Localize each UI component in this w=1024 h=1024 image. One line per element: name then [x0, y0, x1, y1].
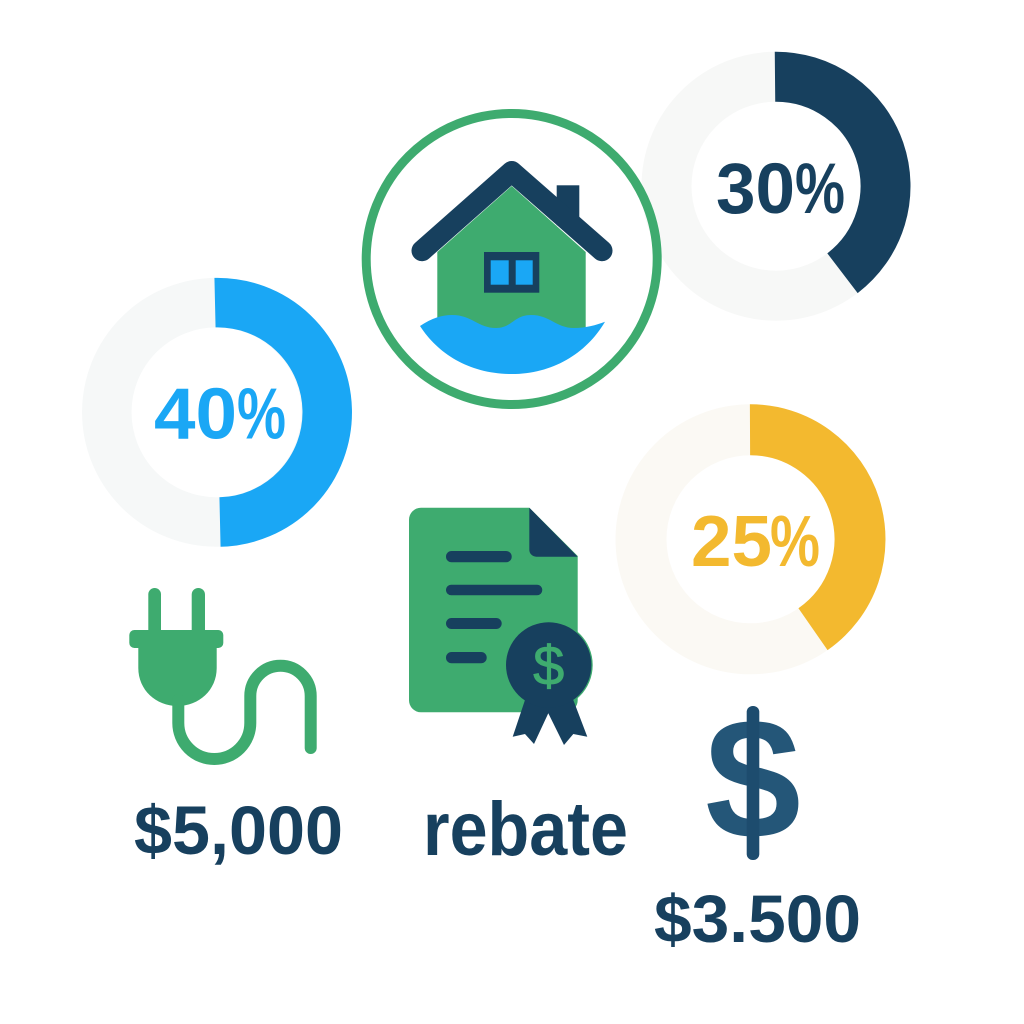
icon: large dollar sign: $	[705, 683, 801, 875]
icon: rebate document with badge: $	[533, 634, 564, 697]
donut chart: 40%: %	[237, 374, 286, 454]
donut chart: 40%	[107, 303, 327, 522]
donut chart: 30%: 30	[716, 150, 795, 229]
label: rebate: rebate	[423, 787, 628, 872]
label: $3.500: $3.500	[654, 882, 861, 957]
donut chart: 25%	[641, 430, 860, 649]
donut chart: 25%: %	[770, 502, 820, 582]
donut chart: 40%: 40	[154, 374, 237, 454]
donut chart: 30%	[666, 77, 886, 296]
icon: rebate document with badge	[409, 508, 593, 745]
donut chart: 25%: 25	[691, 502, 772, 582]
icon: electric plug	[129, 588, 311, 759]
label: $5,000: $5,000	[134, 792, 343, 869]
icon: flooded house in green ring	[366, 114, 657, 404]
donut chart: 30%: %	[795, 150, 845, 229]
